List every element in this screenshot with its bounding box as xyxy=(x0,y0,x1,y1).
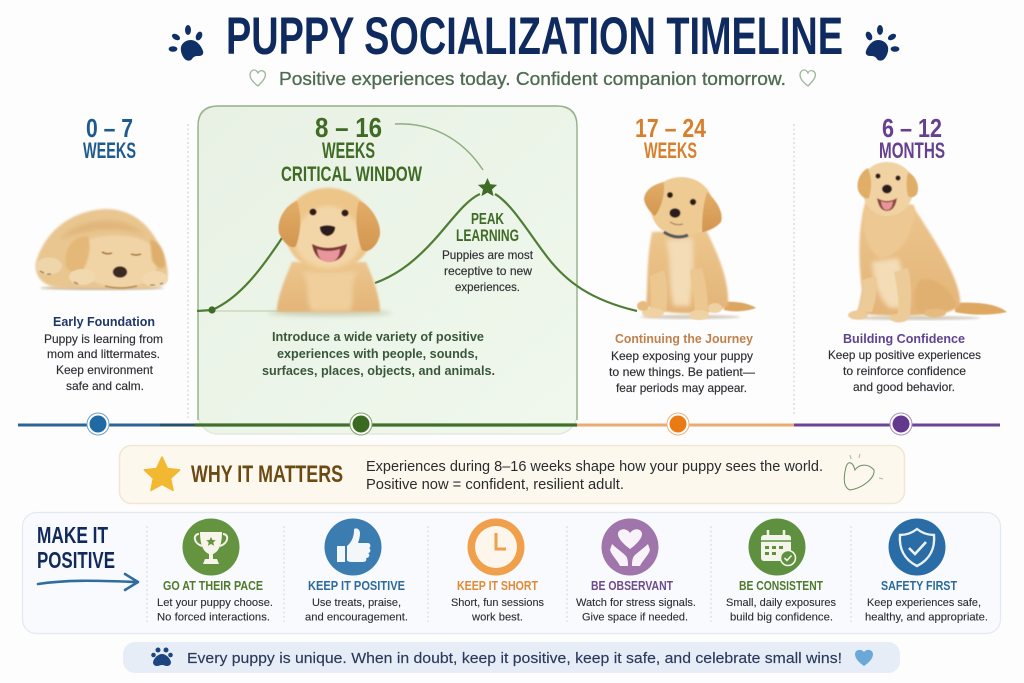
puppy: critical window xyxy=(268,188,392,316)
stage text: continuing the journey: to new things. Be patient— xyxy=(609,365,755,379)
tip: keep it short: Short, fun sessions xyxy=(451,597,544,609)
stage text: early foundation: Keep environment xyxy=(56,363,154,377)
stage text: critical window: experiences with people, sounds, xyxy=(277,346,478,361)
panel: make it positive xyxy=(22,512,1000,634)
tip: go at their pace: Let your puppy choose. xyxy=(157,597,273,609)
stage text: early foundation: mom and littermates. xyxy=(47,347,160,361)
stage text: critical window: Introduce a wide variety of positive xyxy=(272,329,484,344)
header: 8-16 weeks critical window: CRITICAL WINDOW xyxy=(281,162,422,186)
icon: left heart xyxy=(250,70,265,86)
timeline node: 0-7 weeks xyxy=(87,413,109,435)
tip: keep it positive: and encouragement. xyxy=(305,612,408,624)
panel: why it matters xyxy=(120,446,904,504)
header: 6-12 months xyxy=(879,113,945,163)
header: 0-7 weeks: WEEKS xyxy=(83,138,136,163)
header: 17-24 weeks: WEEKS xyxy=(644,138,697,163)
timeline node: 8-16 weeks xyxy=(350,413,372,435)
stage text: early foundation: Puppy is learning from xyxy=(44,332,163,346)
stage text: continuing the journey: Keep exposing your puppy xyxy=(611,349,753,363)
tip: be observant: Watch for stress signals. xyxy=(576,597,696,609)
make it positive heading: MAKE IT xyxy=(37,522,108,548)
stage text: building confidence: and good behavior. xyxy=(853,380,955,394)
stage text: early foundation: Early Foundation xyxy=(53,315,155,329)
tip: be consistent: BE CONSISTENT xyxy=(739,579,823,593)
stage text: continuing the journey: Continuing the Journey xyxy=(615,332,753,346)
timeline xyxy=(18,413,1000,435)
tip: be observant xyxy=(576,518,696,624)
why it matters heading: WHY IT MATTERS xyxy=(191,461,343,488)
tip: safety first: Keep experiences safe, xyxy=(867,597,981,609)
stage text: continuing the journey: fear periods may appear. xyxy=(616,381,747,395)
make it positive heading: POSITIVE xyxy=(37,547,115,573)
dog: adult sitting xyxy=(848,162,1007,322)
footer banner xyxy=(123,642,900,673)
why it matters text: Experiences during 8–16 weeks shape how your puppy sees the world. xyxy=(366,458,823,475)
tip: keep it positive: Use treats, praise, xyxy=(312,597,401,609)
tip: go at their pace xyxy=(157,518,273,624)
icon: footer heart xyxy=(855,650,873,666)
tip: keep it positive xyxy=(305,518,408,624)
peak learning text xyxy=(442,211,534,294)
tip: safety first xyxy=(865,518,988,624)
tip: be consistent: Small, daily exposures xyxy=(726,597,836,609)
chart: learning curve xyxy=(197,124,637,314)
panel: critical window xyxy=(198,106,577,434)
peak learning text: experiences. xyxy=(455,280,520,294)
header: 0-7 weeks xyxy=(83,113,136,163)
tip: safety first: healthy, and appropriate. xyxy=(865,612,988,624)
stage text: critical window xyxy=(262,329,495,378)
stage text: building confidence: Building Confidence xyxy=(843,332,965,346)
icon: left paw xyxy=(169,25,204,61)
peak learning text: Puppies are most xyxy=(442,248,534,262)
arrow xyxy=(38,574,138,590)
tip: safety first: SAFETY FIRST xyxy=(881,579,957,593)
icon: sketched heart xyxy=(844,454,883,490)
icon: footer paw xyxy=(151,648,173,666)
puppy: sitting young xyxy=(637,177,756,320)
icon: peak star xyxy=(478,178,497,196)
tip: keep it short: work best. xyxy=(471,612,523,624)
dividers xyxy=(147,526,851,622)
header: 17-24 weeks: 17 – 24 xyxy=(635,113,706,143)
header: 0-7 weeks: 0 – 7 xyxy=(86,113,133,143)
icon: right paw xyxy=(864,25,899,61)
stage text: building confidence xyxy=(828,332,981,394)
subtitle: Positive experiences today. Confident companion tomorrow. xyxy=(279,69,786,89)
why it matters text: Positive now = confident, resilient adult. xyxy=(366,476,624,493)
stage text: building confidence: Keep up positive experiences xyxy=(828,348,981,362)
header: 17-24 weeks xyxy=(635,113,706,163)
tip: be consistent xyxy=(726,518,836,624)
header: 6-12 months: 6 – 12 xyxy=(882,113,942,143)
timeline node: 17-24 weeks xyxy=(667,413,689,435)
peak learning text: receptive to new xyxy=(444,264,532,278)
footer text: Every puppy is unique. When in doubt, keep it positive, keep it safe, and celebrate small wins! xyxy=(187,650,842,667)
header: 6-12 months: MONTHS xyxy=(879,138,945,163)
tip: go at their pace: GO AT THEIR PACE xyxy=(163,579,263,593)
tip: go at their pace: No forced interactions. xyxy=(157,612,270,624)
tip: be consistent: build big confidence. xyxy=(730,612,833,624)
stage text: early foundation: safe and calm. xyxy=(66,379,144,393)
tip: be observant: Give space if needed. xyxy=(582,612,688,624)
stage text: critical window: surfaces, places, objects, and animals. xyxy=(262,363,495,378)
tip: keep it positive: KEEP IT POSITIVE xyxy=(308,579,405,593)
peak learning text: PEAK xyxy=(471,211,505,228)
tip: be observant: BE OBSERVANT xyxy=(591,579,673,593)
tip: keep it short xyxy=(451,518,544,624)
make it positive heading xyxy=(37,522,115,573)
divider lines xyxy=(188,124,794,418)
header: 8-16 weeks critical window xyxy=(281,112,422,186)
stage text: early foundation xyxy=(44,315,163,393)
header: 8-16 weeks critical window: WEEKS xyxy=(322,138,375,163)
icon: right heart xyxy=(800,70,815,86)
puppy: sleeping xyxy=(36,209,168,290)
stage text: continuing the journey xyxy=(609,332,755,395)
why it matters text xyxy=(366,458,823,493)
timeline node: 6-12 months xyxy=(890,413,912,435)
header: 8-16 weeks critical window: 8 – 16 xyxy=(315,112,382,143)
stage text: building confidence: to reinforce confidence xyxy=(843,364,966,378)
icon: gold star xyxy=(144,457,180,490)
peak learning text: LEARNING xyxy=(456,227,519,245)
tip: keep it short: KEEP IT SHORT xyxy=(457,579,538,593)
